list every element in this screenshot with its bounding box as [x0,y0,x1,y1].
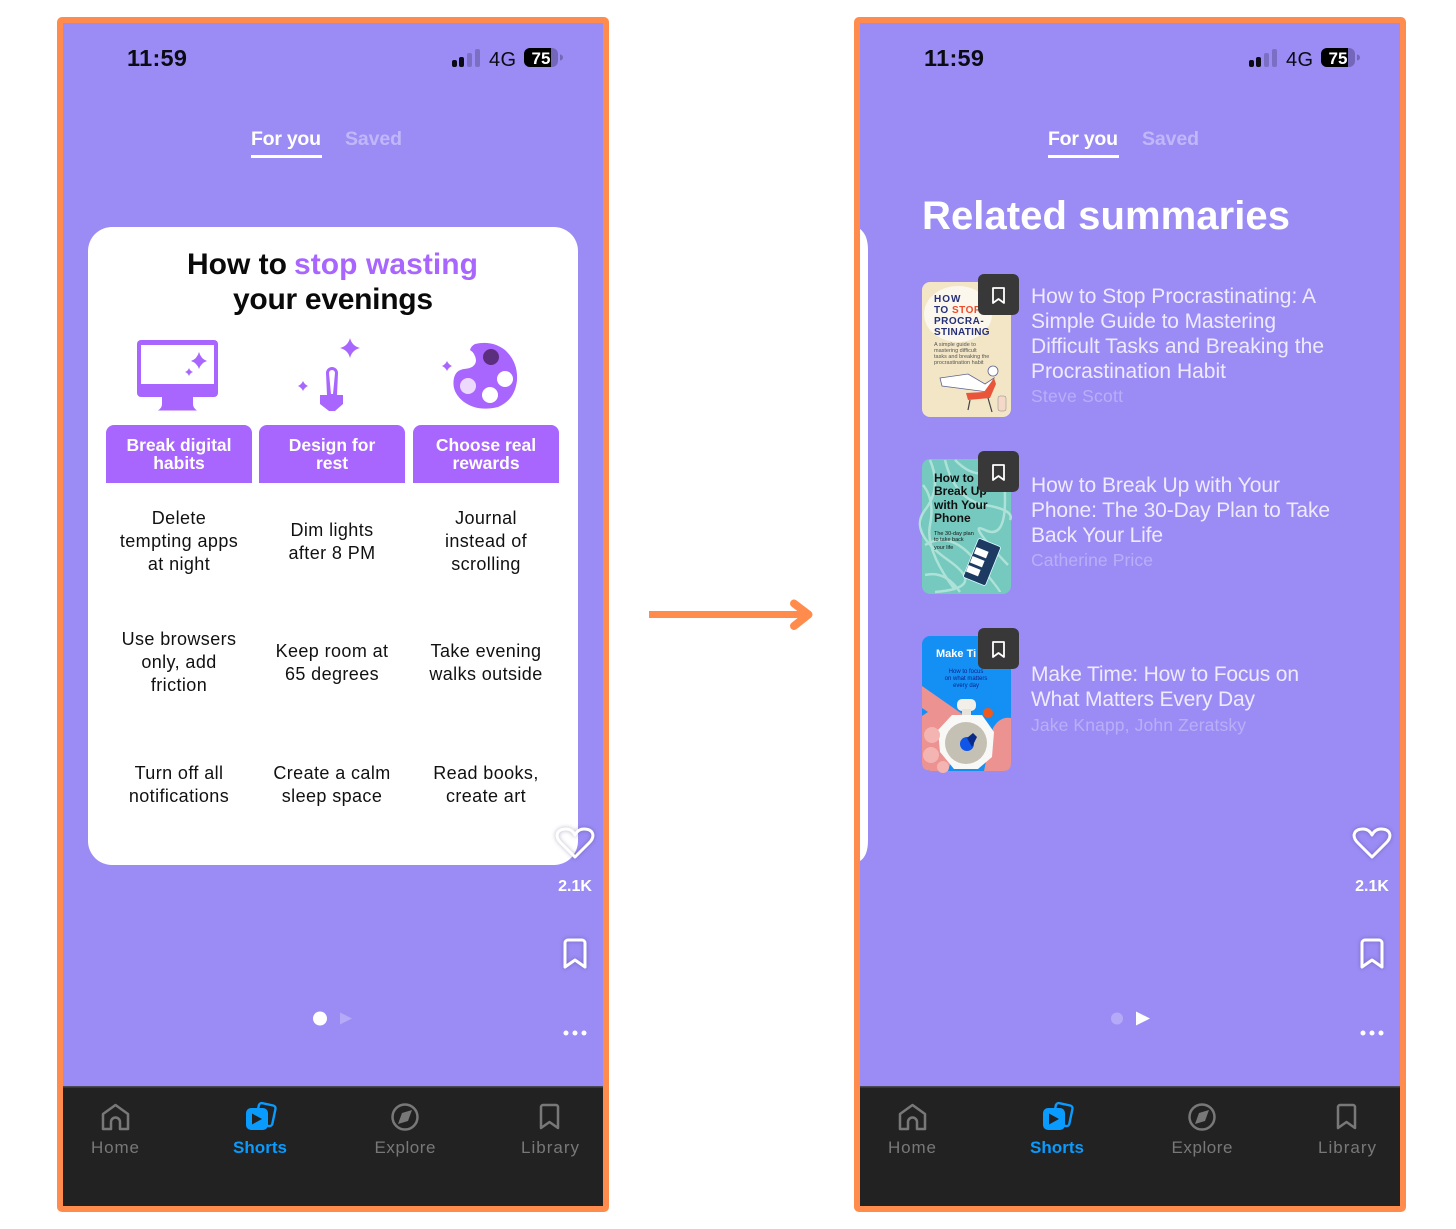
tips row 2: walks outside [428,664,543,684]
icon: more dots [1360,1030,1384,1036]
tabs [1048,128,1199,158]
status bar: 11:59 [924,45,984,71]
bottom navigation [63,1086,603,1206]
summary text [1031,285,1324,406]
summary text: Simple Guide to Mastering [1031,310,1276,333]
nav: shorts [233,1103,287,1157]
nav: home: Home [888,1138,936,1157]
column header: break digital habits [106,425,252,483]
summary text [1031,474,1330,570]
card title [187,248,478,316]
status bar: 75 [532,49,550,68]
summary text: Jake Knapp, John Zeratsky [1031,715,1246,735]
nav: home [91,1105,139,1157]
column header: choose real rewards [413,425,559,483]
summary text: Make Time: How to Focus on [1031,663,1299,686]
book cover: how to stop procrastinating: STINATING [934,327,990,338]
previous card peeking at left edge [860,229,868,861]
nav: library [521,1105,580,1157]
tabs: For you [251,128,321,150]
panel: right phone screen [857,20,1403,1209]
phone frame [60,20,606,1209]
bottom navigation [860,1086,1400,1206]
icon: thermometer with sparkles [298,338,360,411]
book cover: make time: Make Ti [936,648,976,660]
nav: library: Library [521,1138,580,1157]
column header: design for rest [259,425,405,483]
nav: library: Library [1318,1138,1376,1157]
tabs: Saved [1142,128,1199,150]
summary item 3 [922,628,1299,773]
tips row 1: tempting apps [120,531,238,551]
book cover: how to break up with your phone: your life [934,545,953,551]
book cover: how to stop procrastinating: TO STOP [934,305,981,316]
tabs: Saved [345,128,402,150]
pager [1111,1012,1150,1026]
status bar: 11:59 [127,45,187,71]
panel: left phone screen [60,20,606,1209]
tips row 3 [129,763,539,806]
book cover: how to stop procrastinating: PROCRA- [934,316,984,327]
icon: like heart [557,829,593,857]
tips row 2: 65 degrees [285,664,379,684]
summary text: Phone: The 30-Day Plan to Take [1031,499,1330,522]
icon: save bookmark [1362,940,1382,967]
column header: break digital habits: habits [153,453,205,473]
book cover: how to break up with your phone: The 30-day plan [934,531,974,537]
like count: 2.1K [558,878,592,895]
tips row 3: Create a calm [273,763,391,783]
summary text: How to Break Up with Your [1031,474,1280,497]
tips row 1: scrolling [451,554,521,574]
tips row 2: Use browsers [122,629,236,649]
card: how to stop wasting your evenings [88,227,578,865]
summary text: What Matters Every Day [1031,688,1256,711]
nav: explore [374,1104,436,1157]
book cover: make time: How to focus [949,669,983,675]
book cover: how to stop procrastinating: procrastination habit [934,360,984,366]
tips row 2: only, add [141,652,217,672]
tips row 1: instead of [445,531,528,551]
summary text: Back Your Life [1031,524,1163,547]
book cover: make time: every day [953,683,979,689]
nav: shorts [1030,1103,1084,1157]
status bar: 75 [1329,49,1347,68]
bookmark badge [978,628,1019,669]
bookmark badge [978,274,1019,315]
column header: design for rest: rest [316,453,348,473]
status bar: 4G [1286,49,1313,71]
book cover: how to break up with your phone [920,459,1011,594]
icon: like heart [1354,829,1390,857]
nav: home [888,1105,936,1157]
nav: explore: Explore [1172,1138,1232,1157]
summary text: Steve Scott [1031,386,1123,406]
nav: home: Home [91,1138,139,1157]
summary text: Difficult Tasks and Breaking the [1031,335,1324,358]
card title: How to [187,248,287,281]
status bar [127,45,563,71]
status bar [924,45,1360,71]
summary text: Procrastination Habit [1031,360,1226,383]
book cover: how to break up with your phone: with Your [933,498,988,512]
icon: save bookmark [565,940,585,967]
summary text [1031,663,1299,735]
tips row 1: Journal [455,508,517,528]
summary text: Catherine Price [1031,550,1153,570]
column header: break digital habits: Break digital [126,435,232,455]
arrow between screens [649,604,808,626]
icon: monitor [137,340,218,410]
tips row 1: at night [148,554,210,574]
book cover: how to break up with your phone: to take back [934,537,964,543]
tips row 1: Delete [152,508,206,528]
tips row 2: friction [151,675,207,695]
card title: your evenings [233,283,433,316]
book cover: how to break up with your phone: Break Up [934,484,987,498]
tips row 3: create art [446,786,526,806]
tips row 3: notifications [129,786,229,806]
tips row 2: Take evening [431,641,541,661]
book cover: how to break up with your phone: Phone [934,511,971,525]
tabs [251,128,402,158]
tips row 3: Turn off all [135,763,223,783]
status bar: 4G [489,49,516,71]
column header: choose real rewards: rewards [452,453,520,473]
summary item 1 [922,274,1324,417]
book cover: make time [922,636,1011,773]
nav: explore [1172,1104,1232,1157]
tips row 1 [120,508,528,574]
phone frame [857,20,1403,1209]
bookmark badge [978,451,1019,492]
summary text: How to Stop Procrastinating: A [1031,285,1316,308]
nav: shorts: Shorts [1030,1138,1084,1157]
card title: stop wasting [294,248,478,281]
icon: more dots [564,1030,586,1036]
column header: choose real rewards: Choose real [436,435,536,455]
tips row 2 [122,629,543,695]
nav: explore: Explore [374,1138,436,1157]
book cover: how to break up with your phone: How to [934,471,974,485]
tips row 1: after 8 PM [288,543,376,563]
icon: paint palette [442,343,517,409]
tips row 3: sleep space [282,786,382,806]
book cover: how to stop procrastinating: A simple guide to [934,342,976,348]
column header: design for rest: Design for [289,435,375,455]
heading: related summaries: Related summaries [922,194,1290,238]
tabs: For you [1048,128,1118,150]
tips row 3: Read books, [433,763,539,783]
book cover: how to stop procrastinating: mastering difficult [934,348,977,354]
tips row 1: Dim lights [290,520,374,540]
tips row 2: Keep room at [276,641,388,661]
pager [313,1012,352,1026]
nav: shorts: Shorts [233,1138,287,1157]
like count: 2.1K [1355,878,1389,895]
book cover: make time: on what matters [945,676,987,682]
nav: library [1318,1105,1376,1157]
book cover: how to stop procrastinating: HOW [934,294,961,305]
summary item 2 [920,451,1330,594]
book cover: how to stop procrastinating: tasks and breaking the [934,354,989,360]
book cover: how to stop procrastinating [922,282,1011,417]
